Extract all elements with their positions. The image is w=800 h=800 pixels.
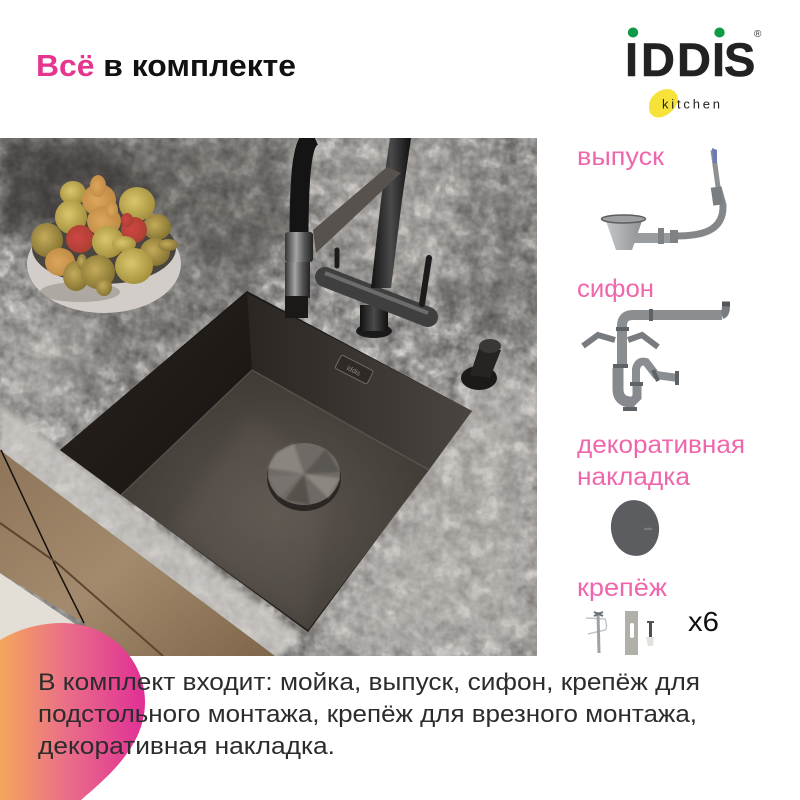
kitchen wordmark: kitchen [662,96,720,112]
faucet base [356,326,392,338]
bolt with hook [586,612,606,653]
floor [0,573,75,640]
sink logo plate: iddis [345,365,362,378]
bracket plate [625,611,638,655]
drain cover [267,443,341,511]
faucet body [325,277,428,317]
label line 2: накладка [577,463,690,491]
body line 2: подстольного монтажа, крепёж для врезного монтажа, [38,701,697,728]
label: крепёж: крепёж [577,574,667,602]
product: decorative cover: iddis [644,526,652,531]
fruit bowl with pears [27,175,181,313]
label: x6: x6 [688,606,719,637]
label: сифон: сифон [577,275,654,303]
chrome collar [285,232,313,262]
product: fasteners [586,611,654,655]
sink bowl [60,291,472,632]
gradient blob [0,623,145,800]
body text [38,669,700,760]
product: сифон siphon [583,304,730,410]
faucet [285,136,429,338]
yellow blob [649,89,678,117]
pears [31,175,178,296]
title: Всё в комплекте [36,48,296,83]
wood cabinet [0,450,275,656]
sink left wall [60,407,121,495]
black hose [299,136,314,240]
spout lower [285,262,310,298]
faucet handles [337,250,429,304]
sink logo plate [335,355,374,384]
sink floor [121,370,429,630]
faucet diagonal arm [313,167,401,253]
photo: sink on stone countertop [0,136,537,656]
faucet main tube [371,138,411,288]
sink back wall [247,293,472,470]
body line 1: В комплект входит: мойка, выпуск, сифон, крепёж для [38,669,700,696]
logo: IDDIS kitchen [625,28,762,117]
stone countertop and wall [0,138,537,656]
product: выпуск drain [602,148,723,250]
label: декоративная накладка [577,431,745,491]
registered mark: ® [754,29,762,40]
bowl [27,246,181,313]
soap dispenser [461,339,501,390]
body line 3: декоративная накладка. [38,733,335,760]
label: выпуск: выпуск [577,143,665,171]
screw with plug [646,621,654,646]
label line 1: декоративная [577,431,745,459]
logo green dots [628,28,725,38]
logo wordmark: IDDIS [625,33,755,86]
product: decorative cover [607,497,663,559]
